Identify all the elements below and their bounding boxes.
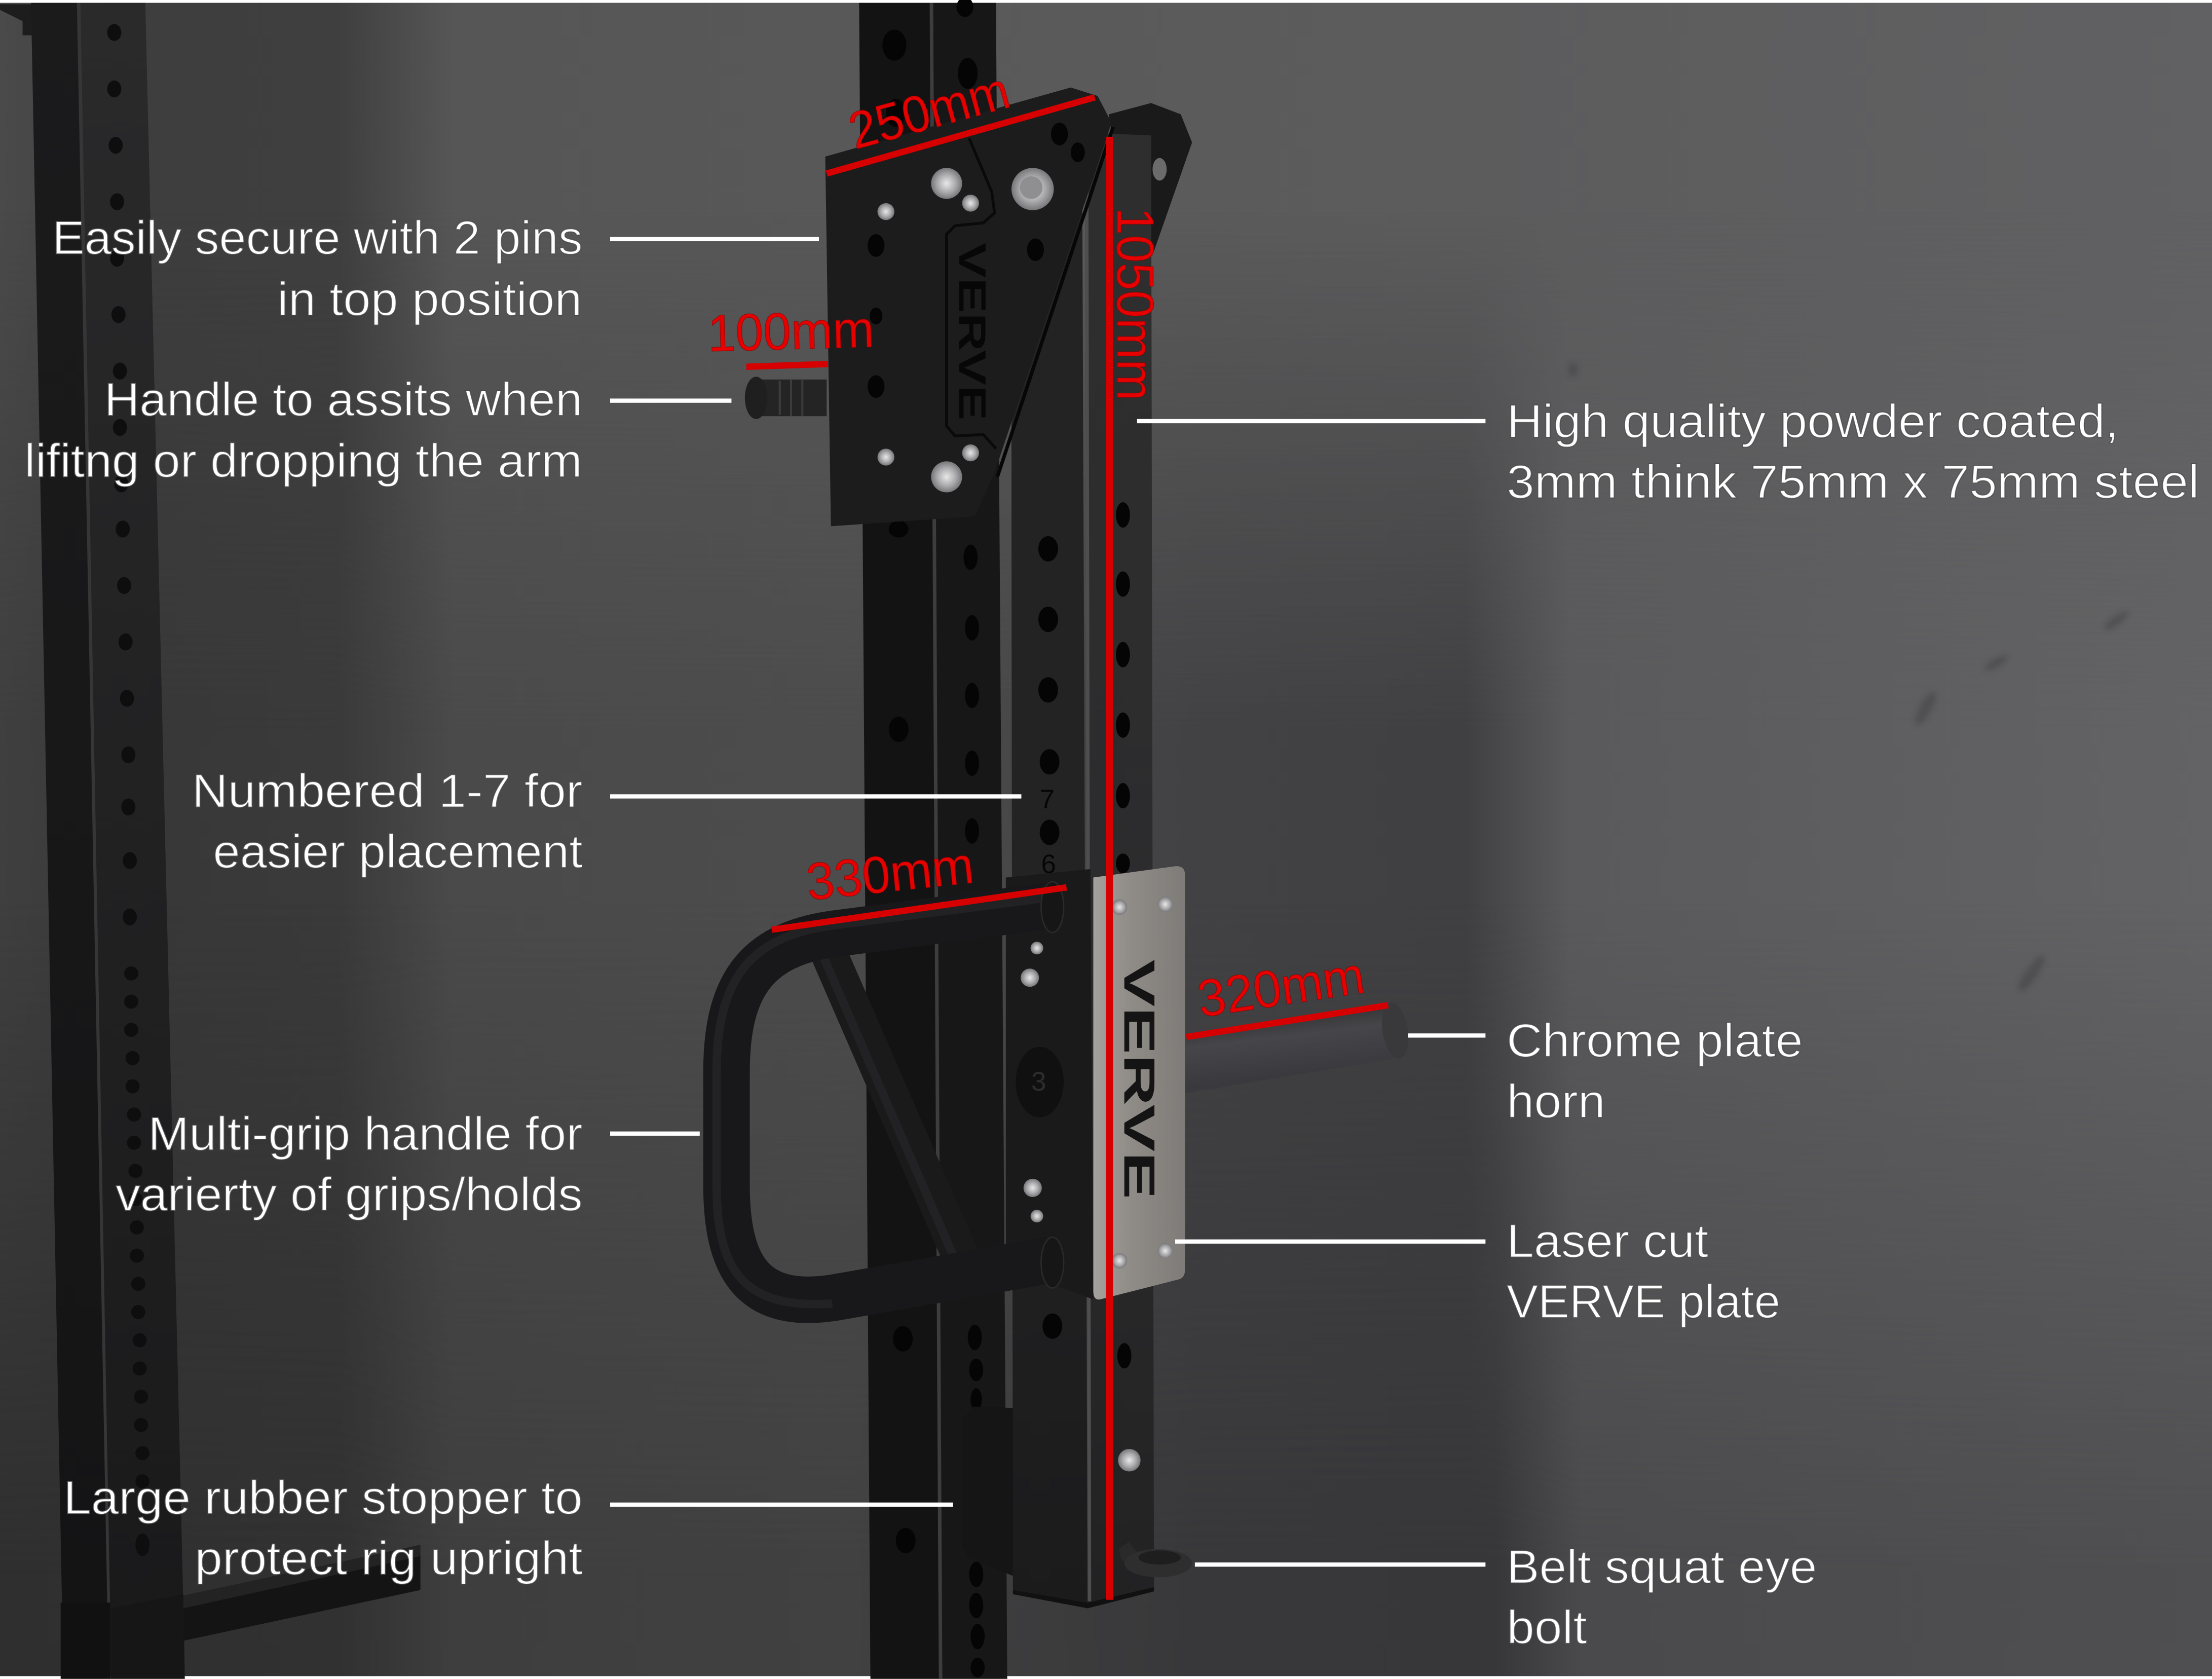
plate screws	[1112, 897, 1173, 1268]
callout: numbered positions: easier placement	[213, 825, 583, 878]
sliding arm column	[1011, 127, 1154, 1609]
callout: rubber stopper	[63, 1471, 953, 1585]
callout: laser cut plate: Laser cut	[1507, 1214, 1708, 1267]
callout: secure with pins	[52, 211, 819, 325]
callout: handle: Handle to assits when	[104, 373, 582, 426]
callout: secure with pins: in top position	[277, 273, 582, 325]
callout: powder coated steel: 3mm think 75mm x 75mm steel	[1507, 456, 2199, 508]
callout: handle	[24, 373, 731, 487]
red dimension: 100mm: 100mm	[707, 300, 875, 362]
background rack upright (left)	[0, 3, 421, 1679]
rear triangular arm bracket	[1109, 103, 1192, 251]
callout: powder coated steel: High quality powder coated,	[1507, 395, 2119, 447]
callout: rubber stopper: Large rubber stopper to	[63, 1471, 583, 1524]
rubber stopper	[962, 1406, 1013, 1576]
callout: chrome plate horn: Chrome plate	[1507, 1014, 1803, 1067]
engraved VERVE logo: VERVE	[951, 243, 994, 421]
callout: chrome plate horn	[1408, 1014, 1803, 1128]
callout: eye bolt: Belt squat eye	[1507, 1540, 1817, 1593]
callout: powder coated steel	[1137, 395, 2199, 508]
top mounting plate	[826, 88, 1113, 526]
chrome plate horn	[1185, 1001, 1412, 1093]
callout: handle: lifitng or dropping the arm	[24, 434, 582, 487]
callout: laser cut plate	[1175, 1214, 1780, 1328]
handle carriage	[1006, 869, 1093, 1299]
pull handle	[745, 377, 827, 419]
callout: eye bolt: bolt	[1507, 1601, 1587, 1654]
red dimension: 1050mm: 1050mm	[1106, 207, 1165, 401]
callout: laser cut plate: VERVE plate	[1507, 1275, 1780, 1328]
callout: multi-grip handle: Multi-grip handle for	[148, 1107, 583, 1160]
plate bolts	[878, 168, 1054, 493]
callout: multi-grip handle: varierty of grips/holds	[116, 1168, 583, 1221]
red dimension: 250mm: 250mm	[842, 61, 1016, 160]
callout: numbered positions: Numbered 1-7 for	[192, 764, 583, 817]
position number 7: 7	[1040, 785, 1055, 814]
laser cut VERVE lettering: VERVE	[1115, 959, 1164, 1199]
callout: eye bolt	[1195, 1540, 1817, 1654]
callout: rubber stopper: protect rig upright	[195, 1532, 583, 1585]
red dimension: 330mm	[772, 836, 1067, 930]
callout: multi-grip handle	[116, 1107, 700, 1220]
position number 6: 6	[1041, 849, 1056, 879]
rear rig upright	[859, 0, 1007, 1679]
stainless VERVE plate	[1093, 866, 1185, 1299]
bolt on column	[1118, 1449, 1141, 1472]
callout: chrome plate horn: horn	[1507, 1075, 1605, 1128]
multi-grip handle	[717, 882, 1064, 1304]
red dimension: 330mm: 330mm	[803, 836, 977, 911]
position number 3: 3	[1031, 1067, 1046, 1097]
callout: secure with pins: Easily secure with 2 pins	[52, 211, 583, 264]
belt squat eye bolt	[1119, 1542, 1192, 1577]
red dimension: 250mm	[827, 61, 1095, 173]
red dimension: 320mm: 320mm	[1193, 946, 1368, 1028]
callout: numbered positions	[192, 764, 1021, 878]
